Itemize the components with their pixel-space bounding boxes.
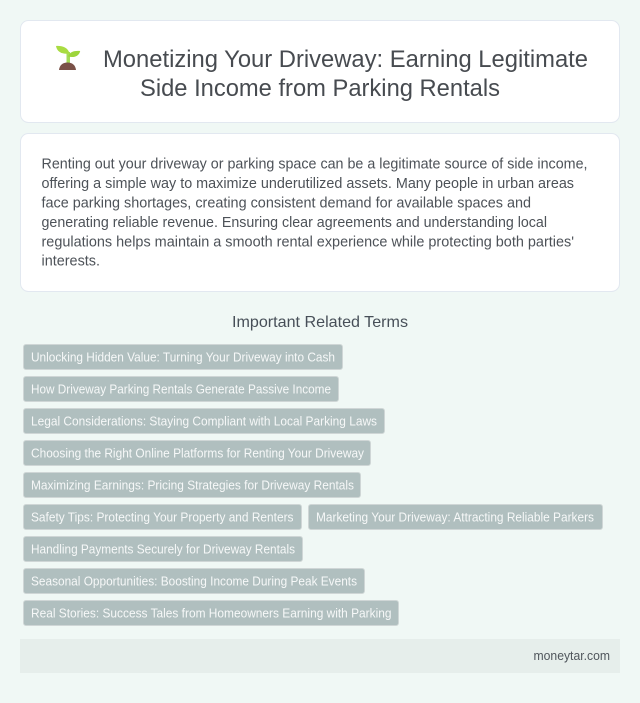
- title: Side Income from Parking Rentals: [140, 75, 500, 102]
- text block: intro paragraph: regulations helps maintain a smooth rental experience while protecting both parties': [42, 234, 574, 250]
- text block: intro paragraph: interests.: [42, 252, 100, 270]
- footer text: moneytar.com: [534, 648, 610, 663]
- tag: [24, 536, 302, 562]
- tag: How Driveway Parking Rentals Generate Passive Income: [31, 382, 331, 396]
- text block: intro paragraph: [42, 156, 588, 270]
- tag: [24, 344, 342, 370]
- tag: [24, 376, 338, 402]
- tag: Seasonal Opportunities: Boosting Income During Peak Events: [31, 574, 357, 588]
- tag: [24, 440, 370, 466]
- tag: Legal Considerations: Staying Compliant with Local Parking Laws: [31, 414, 377, 428]
- title: Monetizing Your Driveway: Earning Legitimate: [103, 46, 588, 73]
- panel: title card: [20, 20, 620, 122]
- tag: Unlocking Hidden Value: Turning Your Driveway into Cash: [31, 350, 335, 364]
- tag: Real Stories: Success Tales from Homeowners Earning with Parking: [31, 606, 392, 620]
- tag: Choosing the Right Online Platforms for Renting Your Driveway: [31, 446, 364, 460]
- text block: intro paragraph: Renting out your driveway or parking space can be a legitimate source of side income,: [42, 156, 588, 172]
- heading: important related terms: Important Related Terms: [232, 314, 408, 331]
- text block: intro paragraph: offering a simple way to maximize underutilized assets. Many people in urban areas: [42, 175, 574, 192]
- footer bar: [20, 639, 620, 673]
- panel: related terms tags: [24, 344, 602, 626]
- tag: [24, 472, 360, 498]
- text block: intro paragraph: face parking shortages, creating consistent demand for available spaces and: [42, 194, 531, 212]
- panel: intro text card: [20, 134, 620, 292]
- text block: intro paragraph: generating reliable revenue. Ensuring clear agreements and understanding local: [42, 214, 547, 231]
- tag: Marketing Your Driveway: Attracting Reliable Parkers: [316, 510, 594, 524]
- tag: [308, 504, 602, 530]
- tag: [24, 600, 398, 626]
- icon: seedling: [56, 46, 80, 70]
- tag: Maximizing Earnings: Pricing Strategies for Driveway Rentals: [31, 478, 354, 492]
- tag: Safety Tips: Protecting Your Property and Renters: [31, 510, 294, 524]
- tag: Handling Payments Securely for Driveway Rentals: [31, 542, 295, 556]
- tag: [24, 568, 364, 594]
- title: [103, 46, 588, 102]
- tag: [24, 504, 302, 530]
- tag: [24, 408, 384, 434]
